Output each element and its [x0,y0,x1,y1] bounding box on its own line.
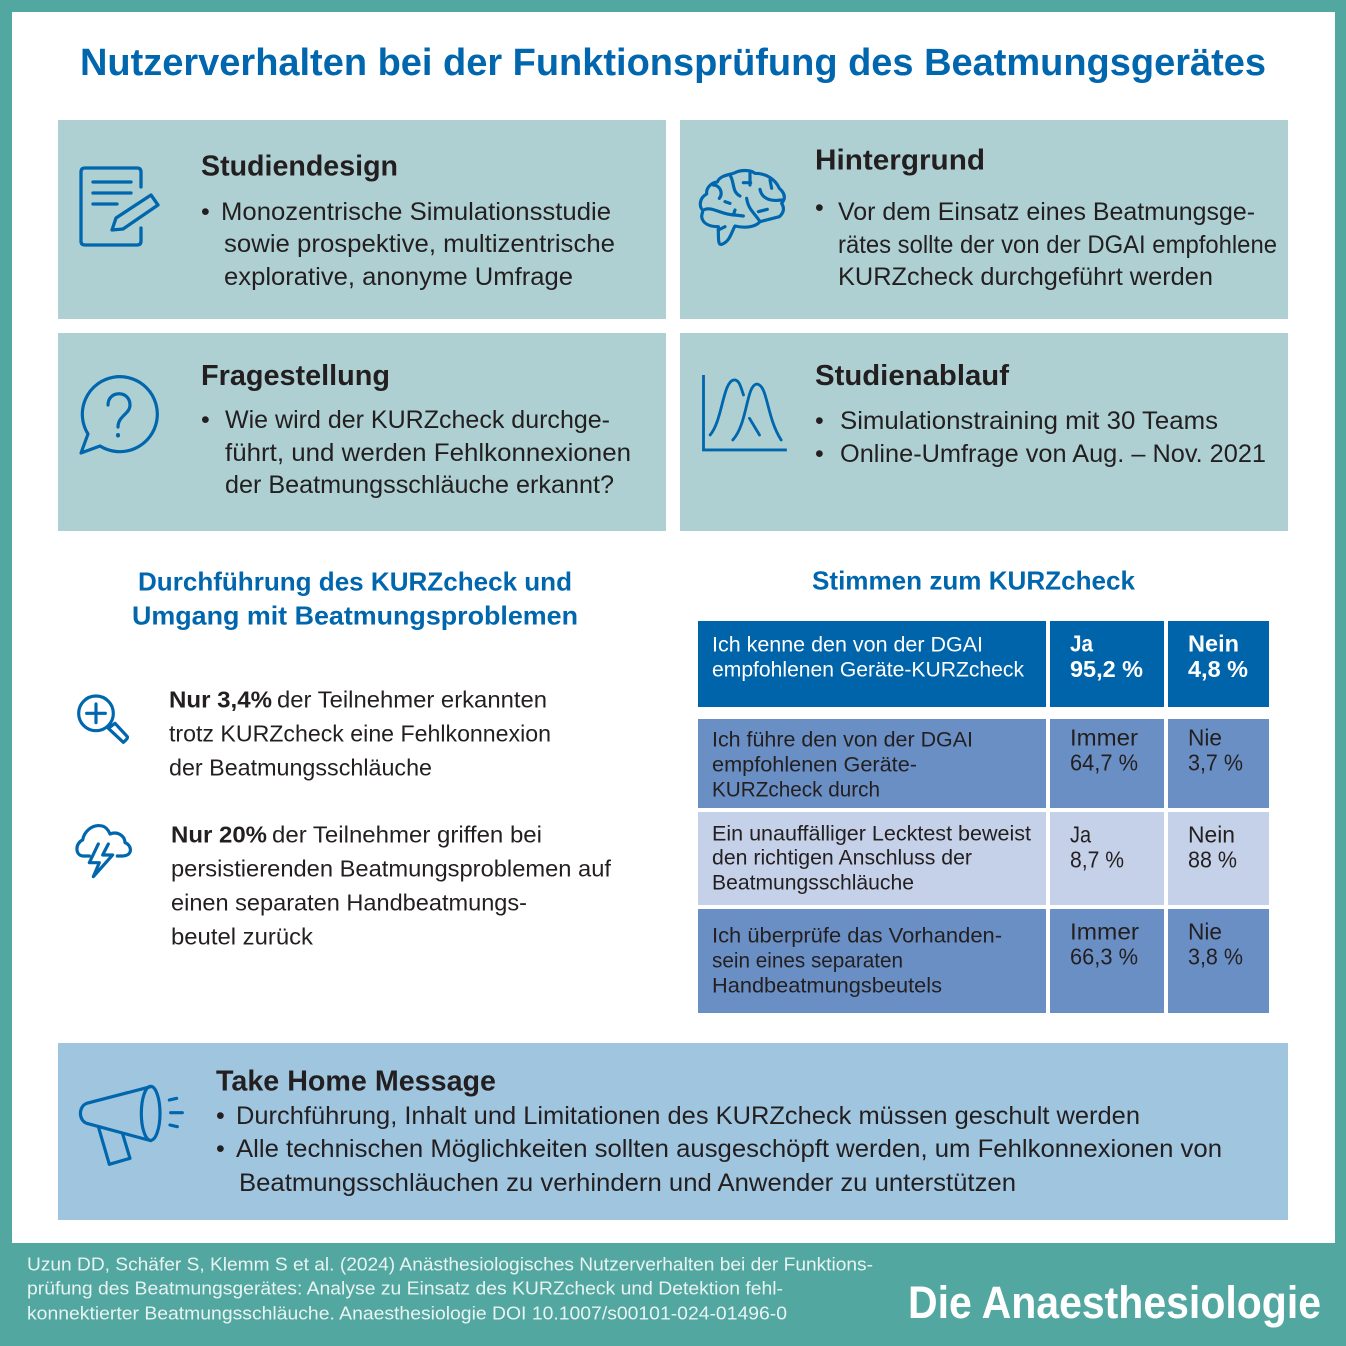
text: Studiendesign bullets: explorative, anonyme Umfrage [224,263,573,291]
table row: Ich führe [698,719,1269,808]
text: finding 20%: persistierenden Beatmungsproblemen auf [171,856,611,882]
table row: Lecktest: den richtigen Anschluss der [712,846,972,870]
footer citation [27,1254,873,1324]
text: Take Home bullets: Durchführung, Inhalt und Limitationen des KURZcheck müssen geschult werden [236,1102,1140,1130]
table header row: Ich kenne den von der DGAI [712,632,983,656]
panel: Take Home Message [58,1043,1288,1220]
footer citation: prüfung des Beatmungsgerätes: Analyse zu Einsatz des KURZcheck und Detektion fehl- [27,1278,783,1298]
table row: Ich führe: Nie [1188,724,1222,750]
title: Nutzerverhalten bei der Funktionsprüfung des Beatmungsgerätes [80,42,1266,84]
text: Studienablauf bullets: Simulationstraining mit 30 Teams [840,407,1218,435]
text: finding 20%: einen separaten Handbeatmungs- [171,890,527,916]
table header row: 95,2 % [1070,656,1143,682]
table row: Handbeatmungsbeutel: 66,3 % [1070,944,1138,970]
table row: Lecktest: 8,7 % [1070,846,1124,872]
text: Take Home bullets: Alle technischen Möglichkeiten sollten ausgeschöpft werden, um Fehlkonnexionen von [236,1135,1222,1163]
text: finding 20%: beutel zurück [171,924,313,950]
icon: magnifying glass [79,696,127,742]
table row: Handbeatmungsbeutel [698,909,1269,1013]
text: Hintergrund bullets: rätes sollte der von der DGAI empfohlene [838,231,1277,259]
icon: megaphone [80,1086,182,1164]
text: finding 20%: Nur 20% [171,822,267,848]
text: Hintergrund bullets: • [815,194,824,222]
text: finding 3,4%: trotz KURZcheck eine Fehlkonnexion [169,720,551,746]
heading: Durchführung des KURZcheck: Umgang mit Beatmungsproblemen [132,600,578,630]
table row: Ich führe: empfohlenen Geräte- [712,752,917,776]
table: survey results [698,621,1269,1013]
heading: Fragestellung: Fragestellung [201,360,390,392]
text: Take Home bullets: • [216,1135,225,1163]
table row: Handbeatmungsbeutel: Ich überprüfe das Vorhanden- [712,924,1002,948]
table row: Ich führe: 3,7 % [1188,750,1243,776]
table row: Ich führe: Ich führe den von der DGAI [712,728,973,752]
table row: Ich führe: KURZcheck durch [712,778,880,802]
table row: Lecktest [698,812,1269,905]
heading: Take Home Message: Take Home Message [216,1066,496,1098]
table header row: empfohlenen Geräte-KURZcheck [712,658,1024,682]
icon: thunder cloud [77,826,130,877]
text: Studienablauf bullets: • [815,440,824,468]
table row: Lecktest: Nein [1188,822,1235,848]
table row: Ich führe: 64,7 % [1070,750,1138,776]
table row: Ich führe: Immer [1070,724,1138,750]
panel: Studienablauf [680,333,1288,531]
icon: document with pen [81,168,158,245]
footer citation: Uzun DD, Schäfer S, Klemm S et al. (2024) Anästhesiologisches Nutzerverhalten bei der Funktions- [27,1254,873,1274]
text: Fragestellung bullets: Wie wird der KURZcheck durchge- [225,406,610,434]
table row: Lecktest: Ja [1070,822,1091,848]
text: Studienablauf bullets [815,407,1266,468]
heading: Hintergrund: Hintergrund [815,144,985,176]
heading: Durchführung des KURZcheck: Durchführung des KURZcheck und [138,566,572,596]
table row: Lecktest: Beatmungsschläuche [712,870,914,894]
text: Studiendesign bullets [201,198,615,291]
table header row [698,621,1269,707]
table row: Handbeatmungsbeutel: sein eines separaten [712,948,903,972]
table header row: Nein [1188,630,1239,656]
icon: brain [700,170,784,244]
text: Take Home bullets [216,1102,1222,1197]
heading: Studienablauf: Studienablauf [815,360,1010,392]
text: finding 3,4%: der Beatmungsschläuche [169,754,432,780]
text: Fragestellung bullets [201,406,631,499]
text: finding 20% [171,822,611,950]
table row: Handbeatmungsbeutel: 3,8 % [1188,944,1243,970]
text: Fragestellung bullets: der Beatmungsschläuche erkannt? [225,471,614,499]
text: Studiendesign bullets: sowie prospektive, multizentrische [224,230,615,258]
text: Fragestellung bullets: führt, und werden Fehlkonnexionen [225,439,631,467]
text: Fragestellung bullets: • [201,406,210,434]
panel: Fragestellung [58,333,666,531]
text: Studiendesign bullets: Monozentrische Simulationsstudie [221,198,611,226]
text: finding 3,4%: Nur 3,4% [169,686,272,712]
text: Studienablauf bullets: Online-Umfrage von Aug. – Nov. 2021 [840,440,1266,468]
text: Take Home bullets: • [216,1102,225,1130]
heading: Stimmen zum KURZcheck: Stimmen zum KURZcheck [812,566,1136,596]
text: finding 3,4% [169,686,551,780]
table row: Handbeatmungsbeutel: Nie [1188,918,1222,944]
text: Hintergrund bullets: Vor dem Einsatz eines Beatmungsge- [838,198,1255,226]
table row: Lecktest: Ein unauffälliger Lecktest beweist [712,822,1031,846]
table row: Lecktest: 88 % [1188,846,1237,872]
text: Hintergrund bullets: KURZcheck durchgeführt werden [838,263,1213,291]
text: finding 20%: der Teilnehmer griffen bei [272,822,542,848]
panel: Hintergrund [680,120,1288,319]
panel: Studiendesign [58,120,666,319]
table header row: Ja [1070,630,1093,656]
table header row: 4,8 % [1188,656,1248,682]
footer citation: konnektierter Beatmungsschläuche. Anaesthesiologie DOI 10.1007/s00101-024-01496-0 [27,1304,787,1324]
text: Hintergrund bullets [815,194,1277,291]
icon: speech bubble with question mark [81,377,157,453]
text: Take Home bullets: Beatmungsschläuchen zu verhindern und Anwender zu unterstützen [239,1169,1016,1197]
text: Studiendesign bullets: • [201,198,210,226]
heading: Durchführung des KURZcheck [132,566,578,630]
table row: Handbeatmungsbeutel: Handbeatmungsbeutels [712,974,942,998]
text: finding 3,4%: der Teilnehmer erkannten [277,686,547,712]
table row: Handbeatmungsbeutel: Immer [1070,918,1139,944]
text: Studienablauf bullets: • [815,407,824,435]
icon: distribution curves [703,375,787,450]
heading: Studiendesign: Studiendesign [201,150,398,182]
